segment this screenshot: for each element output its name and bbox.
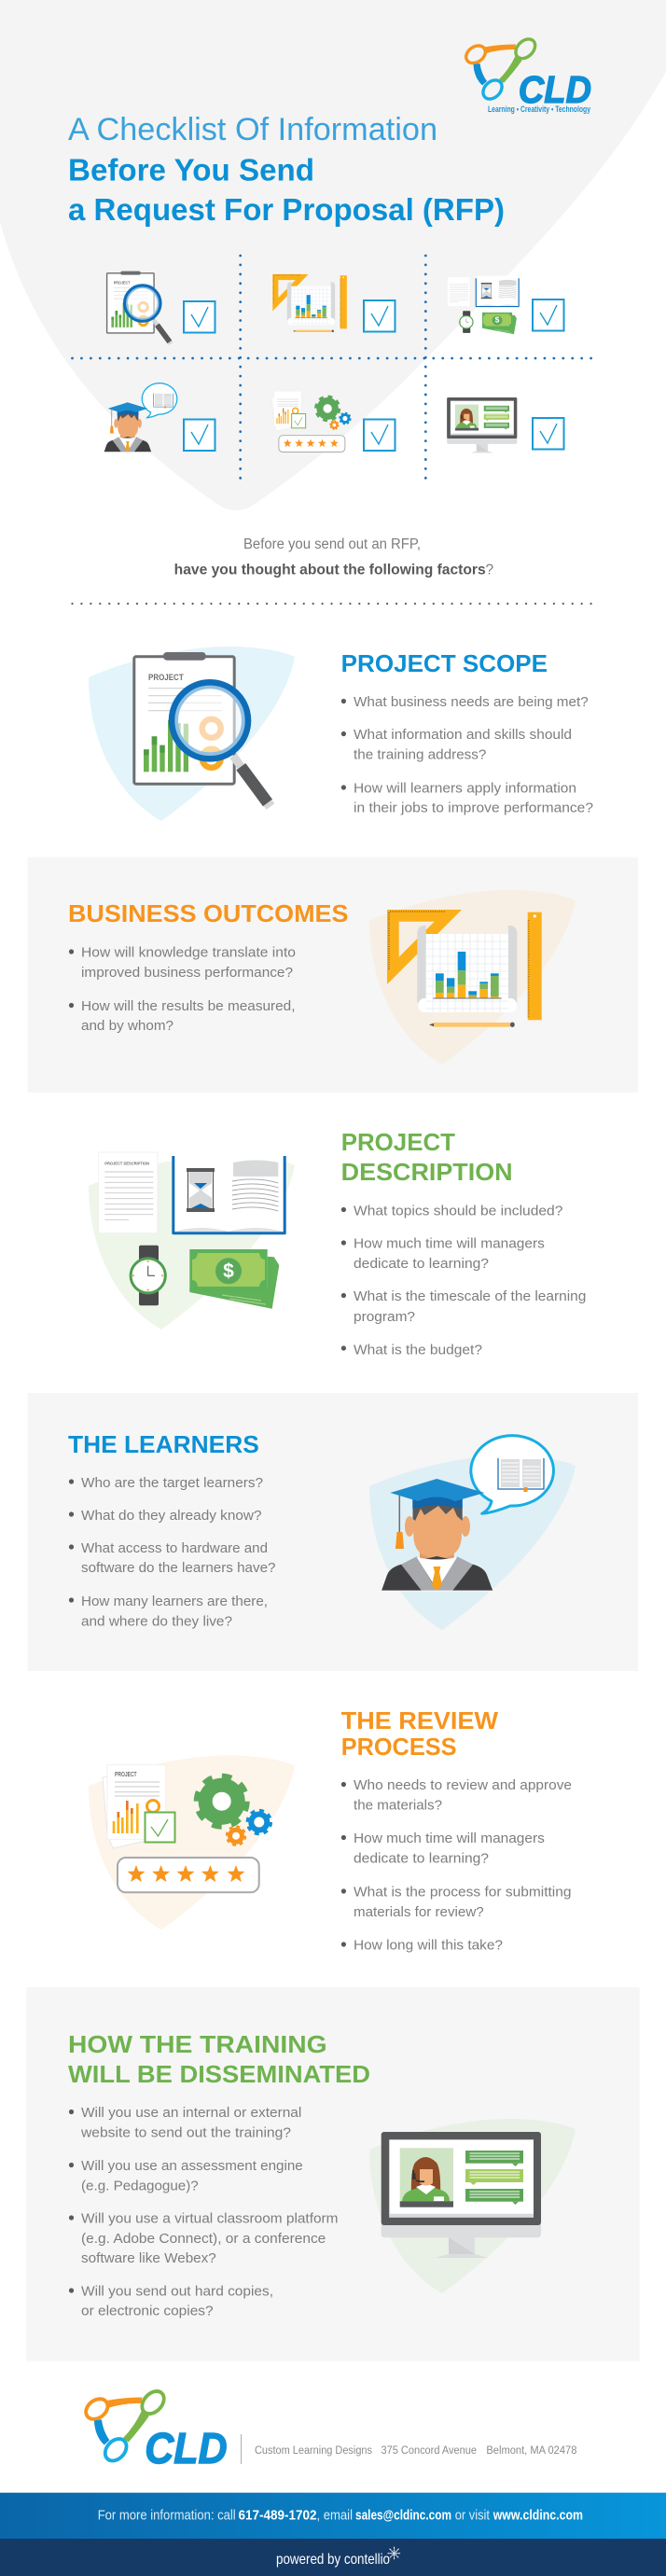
- icon: document, book, watch and money: PROJECT DESCRIPTION: [104, 1162, 150, 1166]
- question list: How long will this take?: [354, 1938, 503, 1954]
- icon: document, book, watch and money: $: [223, 1260, 234, 1282]
- checklist icon: project scope: PROJECT: [114, 281, 131, 285]
- question list: How will learners apply information: [354, 780, 576, 796]
- question list: Will you use an assessment engine: [81, 2158, 303, 2174]
- contact text: 617-489-1702: [239, 2509, 317, 2524]
- question list: What is the process for submitting: [354, 1885, 571, 1901]
- section: project description: [89, 1128, 586, 1358]
- shield backdrop: [369, 890, 576, 1065]
- title: a Request For Proposal (RFP): [68, 192, 505, 227]
- checkbox 5: [364, 420, 395, 451]
- title: Before You Send: [68, 153, 314, 187]
- checkbox 1: [184, 301, 215, 332]
- footer logo: CLD: [145, 2424, 228, 2472]
- question list: [341, 1203, 586, 1358]
- heading: PROJECT: [341, 1128, 455, 1156]
- question list: or electronic copies?: [81, 2304, 214, 2319]
- question list: software do the learners have?: [81, 1560, 276, 1576]
- question list: How much time will managers: [354, 1236, 545, 1252]
- heading: WILL BE DISSEMINATED: [68, 2060, 370, 2088]
- heading: [68, 2030, 370, 2088]
- header logo: Learning • Creativity • Technology: [488, 104, 591, 115]
- intro text: have you thought about the following factors: [174, 562, 486, 578]
- question list: Will you send out hard copies,: [81, 2283, 273, 2299]
- checkbox 4: [184, 420, 215, 451]
- contact text: [98, 2509, 583, 2524]
- intro text: Before you send out an RFP,: [243, 536, 421, 552]
- question list: the materials?: [354, 1798, 442, 1814]
- question list: program?: [354, 1309, 415, 1325]
- question list: dedicate to learning?: [354, 1256, 489, 1272]
- question list: [341, 1777, 572, 1954]
- icon: document, book, watch and money: [99, 1149, 284, 1309]
- background shape: [0, 0, 666, 510]
- question list: and by whom?: [81, 1018, 173, 1034]
- question list: and where do they live?: [81, 1614, 232, 1629]
- header logo: CLD: [519, 68, 591, 111]
- question list: What is the timescale of the learning: [354, 1288, 586, 1304]
- question list: Will you use a virtual classroom platform: [81, 2211, 338, 2227]
- checkbox 6: [533, 418, 563, 450]
- checkbox 2: [364, 300, 395, 332]
- contact text: , email: [317, 2509, 353, 2524]
- question list: materials for review?: [354, 1904, 484, 1920]
- question list: Who needs to review and approve: [354, 1777, 572, 1793]
- question list: the training address?: [354, 746, 486, 763]
- icon: blueprint chart and rulers: [387, 910, 542, 1027]
- contact text: sales@cldinc.com: [355, 2509, 451, 2524]
- checkbox 3: [533, 299, 563, 330]
- contact text: or visit: [455, 2509, 490, 2524]
- contact bar: [0, 2493, 666, 2539]
- question list: (e.g. Adobe Connect), or a conference: [81, 2231, 326, 2247]
- question list: dedicate to learning?: [354, 1851, 489, 1867]
- heading: DESCRIPTION: [341, 1158, 513, 1186]
- question list: software like Webex?: [81, 2250, 216, 2266]
- question list: Who are the target learners?: [81, 1475, 263, 1491]
- shield backdrop: [89, 647, 295, 821]
- panel: how the training will be disseminated: [26, 1987, 640, 2361]
- question list: What information and skills should: [354, 727, 572, 743]
- shield backdrop: [89, 1155, 295, 1330]
- contact text: For more information: call: [98, 2509, 236, 2524]
- address line: 375 Concord Avenue: [381, 2445, 477, 2457]
- intro text: ?: [485, 562, 494, 578]
- heading: THE LEARNERS: [68, 1430, 259, 1458]
- heading: PROCESS: [341, 1733, 457, 1761]
- question list: [69, 2105, 339, 2319]
- heading: THE REVIEW: [341, 1706, 498, 1734]
- shield backdrop: [369, 2119, 576, 2293]
- question list: [341, 694, 593, 816]
- shield backdrop: [369, 1455, 576, 1630]
- section: project scope: [89, 647, 593, 821]
- icon: clipboard with magnifier: [134, 652, 271, 806]
- heading: PROJECT SCOPE: [341, 649, 548, 677]
- question list: What is the budget?: [354, 1342, 482, 1358]
- address line: Custom Learning Designs: [255, 2445, 372, 2457]
- panel: business outcomes: [28, 857, 638, 1093]
- heading: BUSINESS OUTCOMES: [68, 899, 348, 927]
- checklist icon: dissemination: [447, 397, 517, 453]
- intro text: [174, 536, 493, 578]
- question list: What business needs are being met?: [354, 694, 589, 710]
- question list: What access to hardware and: [81, 1540, 268, 1556]
- checklist icon: project description: $: [495, 316, 500, 324]
- question list: How much time will managers: [354, 1831, 545, 1846]
- address line: [255, 2445, 576, 2457]
- footer logo: [82, 2387, 228, 2472]
- icon: report, gears and star rating: PROJECT: [115, 1772, 137, 1778]
- question list: (e.g. Pedagogue)?: [81, 2178, 199, 2193]
- shield backdrop: [89, 1756, 295, 1929]
- heading: HOW THE TRAINING: [68, 2030, 327, 2058]
- question list: What do they already know?: [81, 1508, 261, 1524]
- question list: Will you use an internal or external: [81, 2105, 301, 2121]
- checklist icon: project description: [448, 276, 519, 334]
- checklist icon: review process: [271, 391, 351, 453]
- icon: graduate with speech bubble: [382, 1436, 553, 1591]
- checklist icon: learners: [104, 383, 177, 452]
- icon: clipboard with magnifier: PROJECT: [148, 673, 184, 682]
- question list: How will the results be measured,: [81, 998, 295, 1014]
- question list: How many learners are there,: [81, 1594, 268, 1609]
- question list: website to send out the training?: [80, 2125, 291, 2140]
- icon: contellio star: [388, 2547, 400, 2559]
- question list: What topics should be included?: [354, 1203, 562, 1218]
- heading: [341, 1706, 498, 1761]
- icon: monitor with agent and chat bubbles: [382, 2132, 541, 2258]
- powered by bar: [0, 2539, 666, 2576]
- checklist icon: project scope: [107, 272, 171, 343]
- question list: [69, 945, 296, 1034]
- header logo: [463, 35, 591, 115]
- title: A Checklist Of Information: [68, 112, 437, 147]
- question list: in their jobs to improve performance?: [354, 801, 593, 816]
- heading: [341, 1128, 513, 1186]
- icon: report, gears and star rating: [103, 1765, 271, 1892]
- powered by bar: powered by contellio: [276, 2552, 390, 2568]
- address line: Belmont, MA 02478: [486, 2445, 576, 2457]
- checklist icon: business outcomes: [272, 274, 347, 332]
- question list: How will knowledge translate into: [81, 945, 296, 961]
- question list: improved business performance?: [81, 965, 293, 981]
- contact text: www.cldinc.com: [493, 2509, 583, 2524]
- panel: the learners: [28, 1393, 638, 1671]
- question list: [69, 1475, 276, 1629]
- section: the review process: [89, 1706, 572, 1954]
- title: [68, 112, 505, 227]
